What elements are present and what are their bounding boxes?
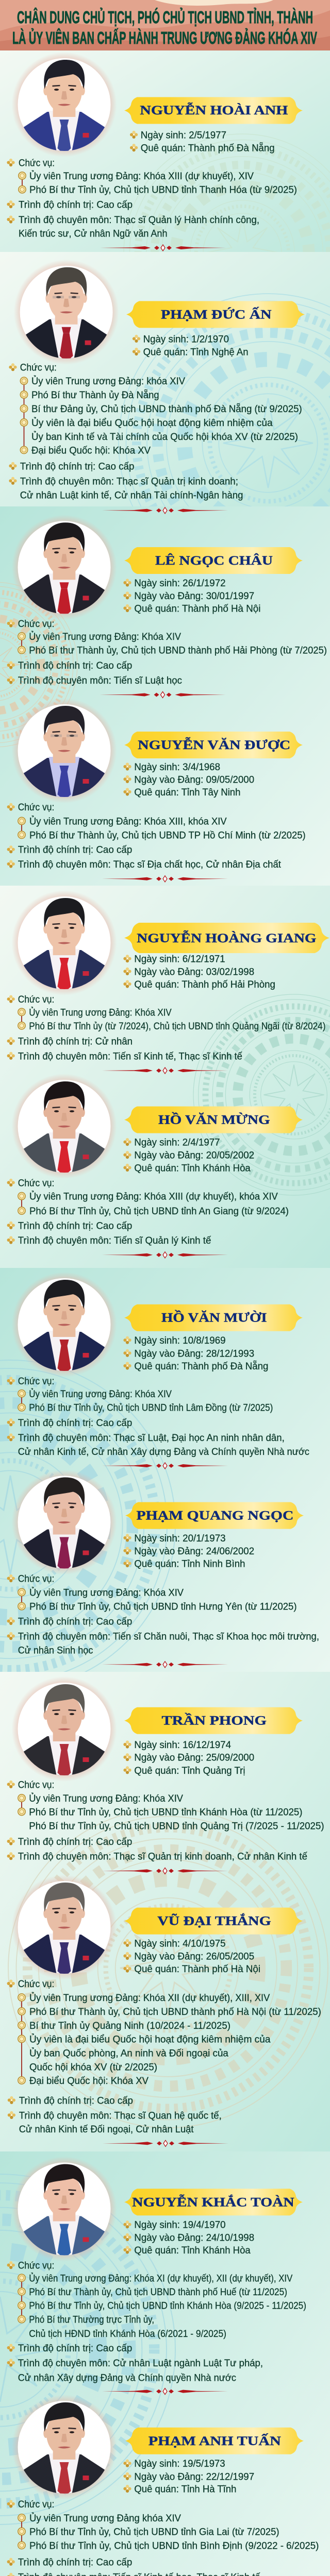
qualifications: Trình độ chuyên môn: Thạc sĩ Luật, Đại học An ninh nhân dân, bbox=[18, 1433, 285, 1444]
positions bbox=[7, 2499, 319, 2551]
portrait bbox=[11, 698, 117, 803]
positions: Ủy viên Trung ương Đảng: Khóa XIV bbox=[29, 1007, 172, 1018]
personal details: Ngày sinh: 2/4/1977 bbox=[134, 1138, 220, 1148]
portrait bbox=[11, 1875, 117, 1980]
portrait bbox=[11, 1074, 117, 1179]
panel: Hồ Văn Mười bbox=[7, 1272, 309, 1469]
positions: Chức vụ: bbox=[19, 158, 55, 169]
qualifications: Cử nhân Xây dựng Đảng và Chính quyền Nhà nước bbox=[18, 2372, 236, 2383]
personal details bbox=[123, 762, 254, 798]
positions: Phó Bí thư Tỉnh ủy, Chủ tịch UBND tỉnh Bình Định (9/2022 - 6/2025) bbox=[29, 2540, 319, 2551]
qualifications: Trình độ chính trị: Cao cấp bbox=[18, 2557, 132, 2568]
personal details: Ngày vào Đảng: 20/05/2002 bbox=[134, 1150, 254, 1161]
qualifications bbox=[7, 2557, 263, 2576]
positions: Ủy viên Trung ương Đảng: Khóa XIII (dự khuyết), khóa XIV bbox=[29, 1191, 278, 1202]
personal details bbox=[123, 1740, 254, 1776]
name ribbon bbox=[126, 301, 305, 328]
qualifications: Trình độ chính trị: Cao cấp bbox=[18, 845, 132, 856]
positions bbox=[7, 1376, 273, 1414]
qualifications: Trình độ chính trị: Cao cấp bbox=[19, 200, 133, 211]
personal details: Ngày sinh: 6/12/1971 bbox=[134, 954, 225, 965]
positions: Ủy viên Trung ương Đảng: Khóa XIV bbox=[29, 1388, 172, 1400]
qualifications bbox=[7, 2343, 263, 2383]
positions: Chức vụ: bbox=[18, 2261, 54, 2272]
name ribbon: PHẠM ĐỨC ẤN bbox=[161, 307, 271, 321]
qualifications: Trình độ chuyên môn: Tiến sĩ Kinh tế, Thạc sĩ Kinh tế bbox=[18, 1051, 242, 1062]
portrait bbox=[11, 515, 117, 620]
positions: Phó Bí thư Thành ủy, Chủ tịch UBND thành phố Hải Phòng (từ 7/2025) bbox=[29, 646, 327, 656]
personal details bbox=[123, 1335, 268, 1372]
personal details: Ngày sinh: 20/1/1973 bbox=[134, 1533, 226, 1544]
positions: Phó Bí thư Tỉnh ủy, Chủ tịch UBND tỉnh Thanh Hóa (từ 9/2025) bbox=[29, 185, 297, 196]
divider bbox=[102, 1067, 228, 1074]
personal details: Quê quán: Thành phố Hải Phòng bbox=[134, 979, 275, 990]
personal details bbox=[123, 1938, 260, 1975]
positions bbox=[7, 2261, 306, 2340]
positions: Phó Bí thư Tỉnh ủy, Chủ tịch UBND tỉnh Gia Lai (từ 7/2025) bbox=[29, 2527, 279, 2538]
qualifications: Trình độ chuyên môn: Cử nhân Luật ngành Luật Tư pháp, bbox=[18, 2358, 263, 2369]
qualifications: Trình độ chính trị: Cao cấp bbox=[18, 1221, 132, 1231]
qualifications bbox=[8, 2095, 222, 2135]
name ribbon: PHẠM ANH TUẤN bbox=[148, 2433, 281, 2448]
qualifications: Kiến trúc sư, Cử nhân Ngữ văn Anh bbox=[19, 229, 167, 240]
divider bbox=[102, 507, 228, 514]
personal details: Quê quán: Tỉnh Hà Tĩnh bbox=[134, 2484, 236, 2495]
qualifications: Cử nhân Kinh tế, Cử nhân Xây dựng Đảng và Chính quyền Nhà nước bbox=[18, 1447, 309, 1458]
personal details: Ngày vào Đảng: 09/05/2000 bbox=[134, 774, 254, 785]
name ribbon bbox=[125, 2428, 304, 2454]
portrait bbox=[11, 52, 117, 157]
personal details: Quê quán: Thành phố Hà Nội bbox=[134, 1964, 260, 1975]
qualifications: Cử nhân Luật kinh tế, Cử nhân Tài chính-Ngân hàng bbox=[20, 490, 243, 501]
positions: Quốc hội khóa XV (từ 2/2025) bbox=[29, 2062, 157, 2073]
qualifications: Trình độ chính trị: Cao cấp bbox=[18, 1837, 132, 1848]
panel: Phạm Anh Tuấn bbox=[7, 2395, 319, 2576]
divider bbox=[102, 1662, 228, 1668]
portrait bbox=[11, 890, 117, 995]
positions bbox=[7, 1979, 321, 2087]
qualifications: Trình độ chính trị: Cao cấp bbox=[18, 2343, 132, 2354]
positions: Ủy viên là đại biểu Quốc hội hoạt động kiêm nhiệm của bbox=[31, 417, 273, 429]
positions: Phó Bí thư Tỉnh ủy, Chủ tịch UBND tỉnh Hưng Yên (từ 11/2025) bbox=[29, 1602, 297, 1613]
positions: Chức vụ: bbox=[18, 1979, 54, 1990]
positions bbox=[7, 619, 327, 656]
personal details: Ngày sinh: 1/2/1970 bbox=[143, 334, 229, 345]
divider bbox=[102, 1252, 228, 1258]
name ribbon: NGUYỄN KHẮC TOÀN bbox=[132, 2194, 294, 2209]
personal details: Ngày sinh: 2/5/1977 bbox=[141, 130, 226, 141]
personal details: Ngày vào Đảng: 28/12/1993 bbox=[134, 1348, 254, 1359]
name ribbon bbox=[124, 923, 329, 953]
name ribbon bbox=[124, 2189, 303, 2215]
panel: Vũ Đại Thắng bbox=[7, 1875, 321, 2146]
positions: Chức vụ: bbox=[18, 1574, 54, 1585]
personal details bbox=[123, 1138, 254, 1174]
qualifications bbox=[7, 845, 282, 870]
personal details: Ngày vào Đảng: 30/01/1997 bbox=[134, 591, 254, 602]
panel: Hồ Văn Mừng bbox=[7, 1074, 303, 1258]
divider bbox=[102, 876, 228, 882]
name ribbon bbox=[124, 1707, 303, 1734]
qualifications: Trình độ chuyên môn: Thạc sĩ Quản trị kinh doanh, Cử nhân Kinh tế bbox=[18, 1852, 307, 1862]
positions: Chủ tịch HĐND tỉnh Khánh Hòa (6/2021 - 9/2025) bbox=[29, 2329, 226, 2340]
positions: Chức vụ: bbox=[18, 994, 54, 1005]
qualifications: Trình độ chính trị: Cao cấp bbox=[19, 2095, 133, 2106]
personal details: Ngày vào Đảng: 24/10/1998 bbox=[134, 2232, 254, 2243]
personal details: Ngày vào Đảng: 25/09/2000 bbox=[134, 1753, 254, 1764]
qualifications: Trình độ chuyên môn: Tiến sĩ Chăn nuôi, Thạc sĩ Khoa học môi trường, bbox=[18, 1631, 319, 1642]
personal details: Quê quán: Tỉnh Nghệ An bbox=[143, 347, 249, 358]
positions: Phó Bí thư Tỉnh ủy, Chủ tịch UBND tỉnh An Giang (từ 9/2024) bbox=[29, 1206, 289, 1217]
personal details bbox=[130, 130, 275, 154]
personal details: Ngày sinh: 4/10/1975 bbox=[134, 1938, 226, 1949]
positions bbox=[7, 1178, 289, 1217]
personal details bbox=[123, 954, 275, 990]
name ribbon bbox=[124, 732, 303, 758]
positions bbox=[7, 994, 325, 1032]
personal details: Ngày sinh: 16/12/1974 bbox=[134, 1740, 231, 1751]
qualifications bbox=[7, 1221, 211, 1246]
panel: Nguyễn Khắc Toàn bbox=[7, 2157, 306, 2395]
positions: Ủy viên Trung ương Đảng: khóa XIV bbox=[31, 376, 185, 387]
panel: Trần Phong bbox=[7, 1676, 324, 1874]
positions: Phó Bí thư Thường trực Tỉnh ủy, bbox=[29, 2315, 154, 2326]
positions bbox=[7, 1780, 324, 1832]
panel: Phạm Quang Ngọc bbox=[7, 1469, 319, 1668]
qualifications: Trình độ chuyên môn: Tiến sĩ Luật học bbox=[18, 675, 182, 686]
divider bbox=[102, 2388, 228, 2395]
personal details: Quê quán: Tỉnh Tây Ninh bbox=[134, 787, 240, 798]
portrait bbox=[11, 2395, 117, 2500]
positions: Ủy viên là đại biểu Quốc hội hoạt động kiêm nhiệm của bbox=[29, 2034, 271, 2045]
positions bbox=[7, 158, 297, 196]
positions: Chức vụ: bbox=[18, 802, 54, 813]
divider bbox=[102, 1868, 228, 1874]
panel: Nguyễn Hoàng Giang bbox=[7, 890, 329, 1074]
personal details bbox=[133, 334, 249, 358]
positions: Phó Bí thư Thành ủy Đà Nẵng bbox=[31, 390, 159, 401]
qualifications: Trình độ chuyên môn: Thạc sĩ Địa chất học, Cử nhân Địa chất bbox=[18, 859, 282, 870]
positions: Bí thư Đảng ủy, Chủ tịch UBND thành phố Đà Nẵng (từ 9/2025) bbox=[31, 404, 302, 415]
qualifications: Trình độ chính trị: Cao cấp bbox=[18, 1617, 132, 1627]
name ribbon bbox=[124, 97, 303, 124]
qualifications: Cử nhân Sinh học bbox=[18, 1645, 93, 1656]
personal details bbox=[123, 1533, 254, 1569]
personal details: Quê quán: Tỉnh Khánh Hòa bbox=[134, 1163, 251, 1174]
positions: Bí thư Tỉnh ủy Quảng Ninh (10/2024 - 11/2025) bbox=[29, 2021, 230, 2031]
positions: Ủy viên Trung ương Đảng: Khóa XI (dự khuyết), XII (dự khuyết), XIV bbox=[29, 2273, 293, 2284]
positions: Phó Bí thư Thành ủy, Chủ tịch UBND TP Hồ Chí Minh (từ 2/2025) bbox=[29, 830, 306, 841]
divider bbox=[103, 2140, 228, 2146]
positions: Chức vụ: bbox=[18, 2499, 54, 2510]
positions: Ủy viên Trung ương Đảng: Khóa XIV bbox=[29, 631, 181, 642]
name ribbon bbox=[124, 1908, 303, 1935]
name ribbon: NGUYỄN HOÀNG GIANG bbox=[137, 930, 317, 945]
positions: Ủy viên Trung ương Đảng: Khóa XIV bbox=[29, 1587, 184, 1598]
divider bbox=[102, 1463, 228, 1469]
qualifications bbox=[7, 1837, 307, 1862]
positions: Ủy ban Kinh tế và Tài chính của Quốc hội khóa XV (từ 2/2025) bbox=[31, 431, 298, 443]
name ribbon: TRẦN PHONG bbox=[162, 1713, 267, 1728]
qualifications bbox=[7, 1037, 242, 1062]
positions: Phó Bí thư Tỉnh ủy, Chủ tịch UBND tỉnh Quảng Trị (7/2025 - 11/2025) bbox=[29, 1821, 324, 1832]
positions: Phó Bí thư Tỉnh ủy, Chủ tịch UBND tỉnh Lâm Đồng (từ 7/2025) bbox=[29, 1403, 273, 1414]
positions bbox=[7, 1574, 297, 1613]
positions: Chức vụ: bbox=[18, 1780, 54, 1790]
qualifications bbox=[7, 1418, 309, 1458]
qualifications bbox=[7, 200, 259, 240]
panel: Nguyễn Hoài Anh bbox=[7, 52, 303, 251]
positions: Ủy ban Quốc phòng, An ninh và Đối ngoại của bbox=[29, 2047, 228, 2059]
name ribbon: VŨ ĐẠI THẮNG bbox=[157, 1913, 271, 1928]
personal details bbox=[123, 578, 260, 614]
personal details: Quê quán: Tỉnh Ninh Bình bbox=[134, 1559, 245, 1569]
positions: Ủy viên Trung ương Đảng: Khóa XII (dự khuyết), XIII, XIV bbox=[29, 1992, 270, 2004]
qualifications bbox=[7, 1617, 319, 1656]
positions: Ủy viên Trung ương Đảng: Khóa XIV bbox=[29, 1793, 183, 1804]
positions: Chức vụ: bbox=[20, 363, 57, 374]
personal details: Ngày sinh: 19/4/1970 bbox=[134, 2220, 226, 2231]
divider bbox=[100, 245, 226, 251]
positions: Ủy viên Trung ương Đảng: Khóa XIII (dự khuyết), XIV bbox=[29, 171, 254, 182]
portrait bbox=[11, 1469, 117, 1574]
name ribbon: NGUYỄN HOÀI ANH bbox=[140, 103, 288, 117]
personal details: Quê quán: Tỉnh Quảng Trị bbox=[134, 1766, 245, 1776]
portrait bbox=[11, 1676, 117, 1782]
name ribbon bbox=[125, 1502, 304, 1529]
personal details: Quê quán: Thành phố Đà Nẵng bbox=[141, 143, 275, 154]
personal details: Ngày vào Đảng: 22/12/1997 bbox=[134, 2471, 254, 2482]
positions: Ủy viên Trung ương Đảng khóa XIV bbox=[29, 2513, 181, 2524]
positions: Phó Bí thư Tỉnh ủy, Chủ tịch UBND tỉnh Khánh Hòa (từ 11/2025) bbox=[29, 1807, 303, 1818]
positions: Phó Bí thư Tỉnh ủy, Chủ tịch UBND tỉnh Khánh Hòa (9/2025 - 11/2025) bbox=[29, 2301, 306, 2312]
qualifications: Trình độ chuyên môn: Thạc sĩ Quản lý Hành chính công, bbox=[19, 215, 259, 226]
positions: Chức vụ: bbox=[18, 1376, 54, 1387]
personal details: Ngày vào Đảng: 26/05/2005 bbox=[134, 1951, 254, 1962]
personal details: Quê quán: Tỉnh Khánh Hòa bbox=[134, 2245, 251, 2256]
qualifications: Trình độ chính trị: Cao cấp bbox=[20, 461, 134, 472]
personal details: Ngày sinh: 26/1/1972 bbox=[134, 578, 226, 589]
qualifications: Trình độ chính trị: Cử nhân bbox=[18, 1037, 133, 1047]
positions bbox=[7, 802, 306, 841]
personal details: Ngày sinh: 19/5/1973 bbox=[134, 2459, 225, 2469]
name ribbon bbox=[124, 1304, 303, 1331]
name ribbon: NGUYỄN VĂN ĐƯỢC bbox=[138, 737, 290, 752]
positions: Ủy viên Trung ương Đảng: Khóa XIII, khóa XIV bbox=[29, 816, 227, 827]
personal details: Quê quán: Thành phố Đà Nẵng bbox=[134, 1361, 268, 1372]
positions: Phó Bí thư Thành ủy, Chủ tịch UBND thành phố Hà Nội (từ 11/2025) bbox=[29, 2007, 321, 2018]
portrait bbox=[11, 2157, 117, 2262]
panel: Nguyễn Văn Được bbox=[7, 698, 306, 882]
positions: Chức vụ: bbox=[18, 619, 54, 630]
qualifications: Trình độ chính trị: Cao cấp bbox=[18, 1418, 132, 1429]
qualifications: Trình độ chuyên môn: Tiến sĩ Quản lý Kinh tế bbox=[18, 1235, 211, 1246]
qualifications bbox=[7, 660, 182, 686]
divider bbox=[100, 691, 226, 698]
name ribbon bbox=[124, 1107, 303, 1133]
personal details bbox=[123, 2220, 254, 2256]
positions: Đại biểu Quốc hội: Khóa XV bbox=[29, 2076, 148, 2087]
positions: Phó Bí thư Thành ủy, Chủ tịch UBND thành phố Huế (từ 11/2025) bbox=[29, 2287, 287, 2298]
qualifications: Trình độ chính trị: Cao cấp bbox=[18, 660, 132, 671]
name ribbon: HỒ VĂN MỪNG bbox=[158, 1112, 270, 1127]
qualifications: Cử nhân Kinh tế Đối ngoại, Cử nhân Luật bbox=[19, 2124, 194, 2135]
panel: Lê Ngọc Châu bbox=[7, 515, 327, 698]
personal details: Ngày vào Đảng: 03/02/1998 bbox=[134, 967, 254, 977]
qualifications: Trình độ chuyên môn: Thạc sĩ Quản trị kinh doanh; bbox=[20, 476, 238, 487]
name ribbon: LÊ NGỌC CHÂU bbox=[155, 553, 273, 568]
positions: Đại biểu Quốc hội: Khóa XV bbox=[31, 445, 151, 456]
personal details: Ngày sinh: 10/8/1969 bbox=[134, 1335, 226, 1346]
personal details: Ngày vào Đảng: 24/06/2002 bbox=[134, 1546, 254, 1557]
name ribbon: PHẠM QUANG NGỌC bbox=[136, 1509, 293, 1523]
personal details bbox=[123, 2459, 254, 2495]
positions: Chức vụ: bbox=[18, 1178, 54, 1189]
panel: Phạm Đức Ấn bbox=[9, 260, 305, 514]
qualifications bbox=[9, 461, 243, 501]
personal details: Quê quán: Thành phố Hà Nội bbox=[134, 604, 260, 614]
portrait bbox=[11, 1272, 117, 1377]
name ribbon bbox=[124, 547, 303, 574]
name ribbon: HỒ VĂN MƯỜI bbox=[161, 1310, 267, 1325]
personal details: Ngày sinh: 3/4/1968 bbox=[134, 762, 220, 773]
header banner with title bbox=[0, 0, 330, 50]
portrait bbox=[14, 260, 119, 365]
qualifications: Trình độ chuyên môn: Thạc sĩ Quan hệ quốc tế, bbox=[19, 2110, 222, 2121]
positions bbox=[9, 363, 302, 456]
